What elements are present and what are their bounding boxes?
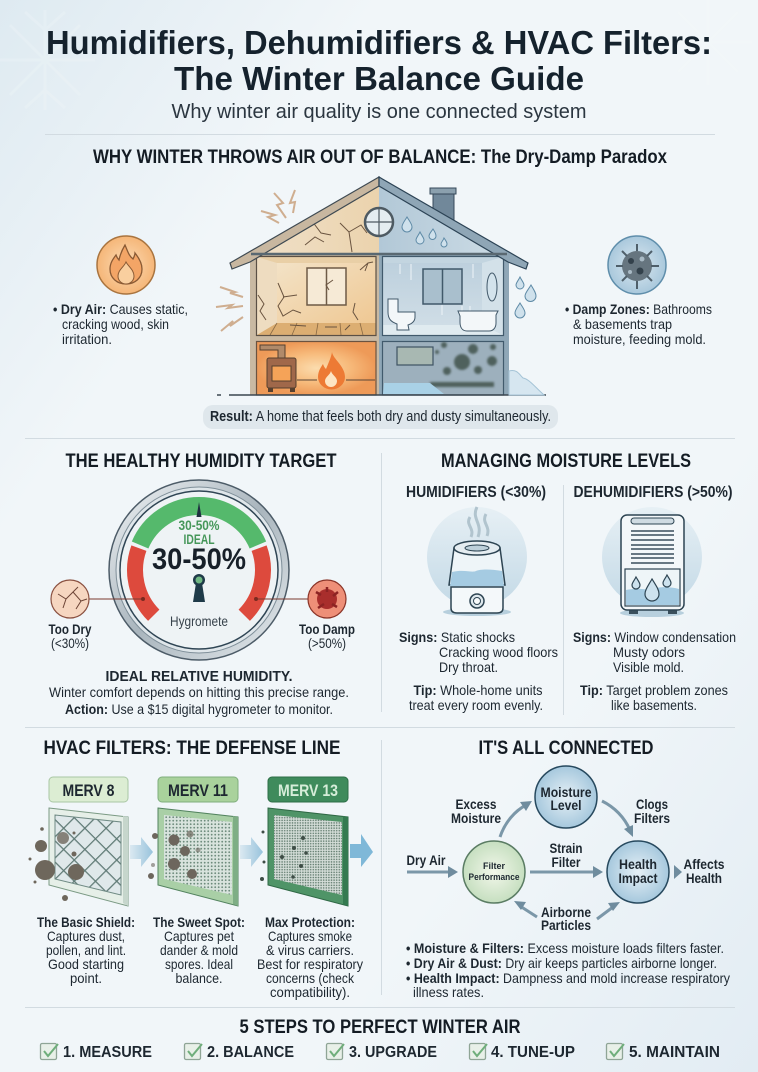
label: dry air: Dry Air — [406, 852, 446, 868]
text: humidifier tip: treat every room evenly. — [409, 697, 543, 713]
icon: dehumidifier — [602, 507, 702, 617]
text: dehumidifier signs: Musty odors — [613, 644, 685, 660]
toilet — [388, 299, 415, 330]
badge: merv 8: MERV 8 — [62, 781, 114, 800]
text: max protection: concerns (check — [266, 970, 355, 986]
text: dehumidifier signs — [573, 629, 736, 675]
diagram: connected cycle — [406, 766, 725, 933]
window wet — [423, 269, 462, 304]
node: moisture level: Moisture — [540, 784, 592, 800]
badge: merv 11: MERV 11 — [168, 781, 228, 800]
mirror — [487, 273, 497, 301]
heading: connected: IT'S ALL CONNECTED — [478, 738, 654, 759]
text: sweet spot: dander & mold — [160, 942, 238, 958]
heading: hvac filters: HVAC FILTERS: THE DEFENSE LINE — [44, 738, 340, 759]
text: dehumidifier signs: Signs: Window condensation — [573, 629, 736, 645]
illustration: split house — [216, 177, 546, 395]
badge: merv 11 — [158, 777, 238, 802]
cracks — [258, 221, 373, 330]
label: too dry — [48, 621, 92, 651]
text: connection bullets: • Dry Air & Dust: Dry air keeps particles airborne longer. — [406, 955, 717, 971]
label: strain filter — [550, 840, 582, 870]
icon: humidifier — [427, 507, 527, 616]
ground line — [217, 394, 546, 396]
text: humidifier tip — [409, 682, 543, 713]
filter: merv 11 — [148, 808, 238, 906]
text: sweet spot: balance. — [176, 970, 222, 986]
text: max protection — [257, 914, 363, 1000]
node: filter performance: Filter — [483, 861, 505, 872]
text: connection bullets: • Moisture & Filters: Excess moisture loads filters faster. — [406, 940, 724, 956]
text: basic shield: point. — [70, 970, 102, 986]
text: humidifier tip: Tip: Whole-home units — [414, 682, 542, 698]
badge: merv 13 — [268, 777, 348, 802]
drops — [402, 217, 536, 318]
arrow: merv 13 output — [350, 834, 373, 867]
text: ideal humidity — [49, 668, 349, 717]
gauge: ideal label: 30-50% — [178, 517, 220, 533]
icon: too dry — [51, 580, 89, 618]
label: strain filter: Filter — [552, 854, 581, 870]
gauge: main value: 30-50% — [152, 543, 246, 576]
subtitle: Why winter air quality is one connected system — [172, 101, 586, 123]
label: too dry: Too Dry — [48, 621, 92, 637]
label: excess moisture: Excess — [456, 796, 497, 812]
text: max protection: Captures smoke — [268, 928, 352, 944]
label: airborne particles: Airborne — [541, 904, 591, 920]
title: The Winter Balance Guide — [174, 60, 584, 97]
text: sweet spot: spores. Ideal — [165, 956, 233, 972]
static sparks — [216, 190, 295, 331]
node: moisture level: Level — [550, 797, 582, 813]
text: ideal humidity: Action: Use a $15 digital hygrometer to monitor. — [65, 701, 333, 717]
damp room — [382, 256, 504, 336]
label: too damp — [299, 621, 355, 651]
label: strain filter: Strain — [550, 840, 582, 856]
gauge: top tick — [196, 502, 202, 517]
label: affects health — [684, 856, 725, 886]
label: airborne particles: Particles — [541, 917, 591, 933]
text: max protection: compatibility). — [270, 984, 350, 1000]
text: dehumidifier signs: Visible mold. — [613, 659, 684, 675]
basement damp — [382, 342, 504, 395]
text: damp zones — [565, 301, 712, 347]
label: affects health: Affects — [684, 856, 725, 872]
round window — [365, 208, 393, 236]
chart: hygrometer gauge: IDEAL — [184, 531, 215, 547]
icon: flame — [97, 236, 155, 294]
text: connection bullets: • Health Impact: Dampness and mold increase respiratory — [406, 970, 730, 986]
gauge: label: Hygromete — [170, 613, 228, 629]
label: clogs filters: Clogs — [636, 796, 668, 812]
text: dehumidifier tip: Tip: Target problem zones — [580, 682, 728, 698]
text: sweet spot — [153, 914, 245, 986]
basement dry — [256, 342, 376, 395]
chart: hygrometer gauge — [109, 480, 289, 660]
stove — [260, 345, 296, 392]
arrow: merv 11 to 13 — [240, 837, 263, 867]
label: too damp: (>50%) — [308, 635, 346, 651]
label: airborne particles — [541, 904, 591, 933]
heading: humidity target: THE HEALTHY HUMIDITY TARGET — [66, 451, 337, 472]
node: health impact: Impact — [618, 870, 658, 886]
heading: five steps: 5 STEPS TO PERFECT WINTER AIR — [240, 1017, 521, 1038]
text: humidifier signs: Signs: Static shocks — [399, 629, 515, 645]
gauge: green ideal arc — [140, 506, 258, 545]
filter: merv 8 — [28, 808, 128, 906]
text: basic shield: The Basic Shield: — [37, 914, 135, 930]
label: affects health: Health — [686, 870, 722, 886]
step 5: 5. MAINTAIN — [629, 1044, 720, 1061]
text: basic shield: Captures dust, — [47, 928, 125, 944]
arrow: merv 8 to 11 — [130, 837, 153, 867]
label: excess moisture: Moisture — [451, 810, 501, 826]
callout: result — [203, 405, 558, 429]
text: ideal humidity: Winter comfort depends on hitting this precise range. — [49, 684, 349, 700]
text: dehumidifier tip — [580, 682, 728, 713]
text: damp zones: • Damp Zones: Bathrooms — [565, 301, 712, 317]
node: filter performance: Performance — [468, 872, 520, 883]
badge: merv 8 — [49, 777, 128, 802]
text: dry air — [53, 301, 188, 347]
title: Humidifiers, Dehumidifiers & HVAC Filters: — [46, 24, 712, 61]
arrows — [407, 801, 682, 919]
text: dehumidifier tip: like basements. — [611, 697, 697, 713]
label: clogs filters: Filters — [634, 810, 670, 826]
heading: dry-damp paradox: WHY WINTER THROWS AIR OUT OF BALANCE: The Dry-Damp Paradox — [93, 147, 667, 168]
window dry — [307, 268, 346, 305]
filter: merv 13 — [260, 808, 348, 906]
icon: mold spore — [608, 236, 666, 294]
title — [46, 24, 712, 97]
label: too dry: (<30%) — [51, 635, 89, 651]
text: humidifier signs: Cracking wood floors — [439, 644, 558, 660]
roof — [230, 177, 528, 269]
step 4: 4. TUNE-UP — [491, 1044, 575, 1061]
snow — [509, 371, 544, 395]
text: damp zones: moisture, feeding mold. — [573, 331, 706, 347]
node: health impact: Health — [619, 856, 657, 872]
subheading: dehumidifiers: DEHUMIDIFIERS (>50%) — [574, 484, 732, 501]
text: humidifier signs: Dry throat. — [439, 659, 498, 675]
text: connection bullets — [406, 940, 730, 1000]
text: basic shield: Good starting — [48, 956, 124, 972]
node: filter performance — [463, 841, 525, 903]
step 3: 3. UPGRADE — [349, 1044, 437, 1061]
callout: result: Result: A home that feels both dry and dusty simultaneously. — [210, 409, 551, 425]
gauge: left red arc — [135, 548, 154, 615]
basement mold — [430, 342, 497, 387]
text: ideal humidity: IDEAL RELATIVE HUMIDITY. — [106, 668, 292, 685]
text: dry air: cracking wood, skin — [62, 316, 169, 332]
bathtub — [458, 311, 498, 331]
text: basic shield — [37, 914, 135, 986]
icon: too damp — [308, 580, 346, 618]
subheading: humidifiers: HUMIDIFIERS (<30%) — [406, 484, 546, 501]
text: max protection: & virus carriers. — [266, 942, 354, 958]
step 1: 1. MEASURE — [63, 1044, 152, 1061]
text: humidifier signs — [399, 629, 558, 675]
badge: merv 13: MERV 13 — [278, 781, 338, 800]
label: too damp: Too Damp — [299, 621, 355, 637]
attic — [258, 184, 500, 253]
dry room — [256, 256, 376, 336]
node: health impact — [607, 841, 669, 903]
text: dry air: irritation. — [62, 331, 112, 347]
text: sweet spot: The Sweet Spot: — [153, 914, 245, 930]
text: max protection: Best for respiratory — [257, 956, 363, 972]
text: dry air: • Dry Air: Causes static, — [53, 301, 188, 317]
gauge: right red arc — [244, 548, 263, 615]
node: moisture level — [535, 766, 597, 828]
text: damp zones: & basements trap — [573, 316, 672, 332]
chimney — [430, 188, 456, 223]
gauge: needle — [193, 574, 205, 602]
label: excess moisture — [451, 796, 501, 826]
text: sweet spot: Captures pet — [164, 928, 234, 944]
fire flame — [318, 352, 345, 389]
text: basic shield: pollen, and lint. — [46, 942, 126, 958]
step 2: 2. BALANCE — [207, 1044, 294, 1061]
label: clogs filters — [634, 796, 670, 826]
text: connection bullets: illness rates. — [413, 984, 484, 1000]
heading: managing moisture: MANAGING MOISTURE LEVELS — [441, 451, 691, 472]
walls — [250, 253, 509, 395]
text: max protection: Max Protection: — [265, 914, 355, 930]
